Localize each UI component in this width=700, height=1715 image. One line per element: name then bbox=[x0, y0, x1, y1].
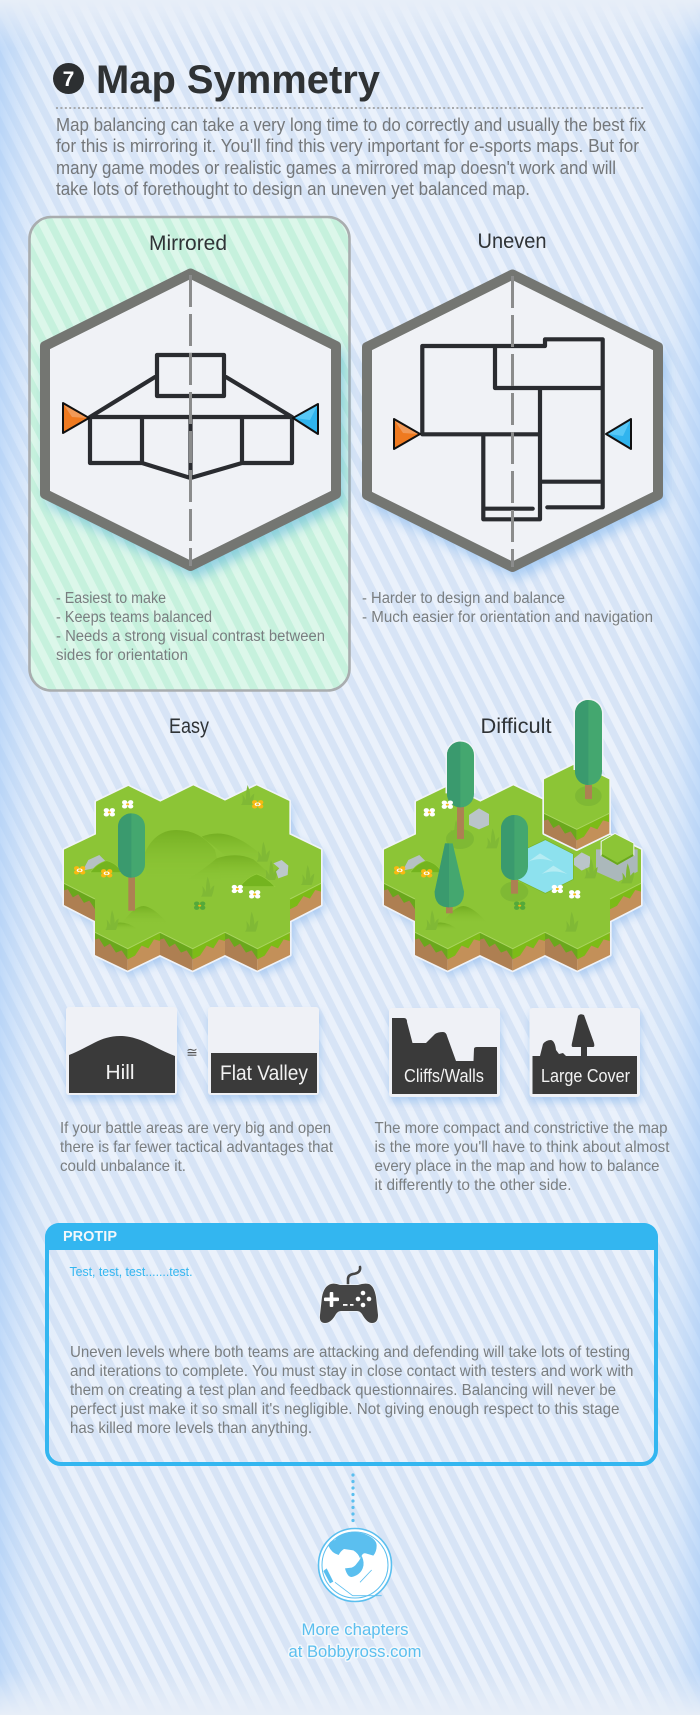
grey cover block bbox=[596, 834, 638, 882]
protip body text: has killed more levels than anything. bbox=[70, 1420, 312, 1437]
intro paragraph: many game modes or realistic games a mirrored map doesn't work and will bbox=[56, 158, 616, 178]
caption: easy: If your battle areas are very big and open bbox=[60, 1120, 331, 1137]
uneven notes bbox=[362, 590, 653, 626]
rocks and bushes bbox=[403, 808, 590, 930]
water bbox=[517, 840, 573, 893]
grass tufts bbox=[425, 820, 634, 932]
protip label: PROTIP bbox=[63, 1228, 117, 1245]
protip body text: and iterations to complete. You must stay in close contact with testers and work with bbox=[70, 1363, 634, 1380]
caption: difficult: it differently to the other side. bbox=[374, 1177, 572, 1194]
protip header bar bbox=[45, 1223, 658, 1250]
island: difficult bbox=[384, 698, 645, 975]
terrain card: large cover bbox=[530, 1008, 640, 1097]
terrain card shadows bbox=[67, 1012, 641, 1102]
dotted connector bbox=[351, 1475, 355, 1522]
caption: difficult: The more compact and constrictive the map bbox=[374, 1120, 668, 1137]
caption: easy: there is far fewer tactical advantages that bbox=[60, 1139, 334, 1156]
protip body text: perfect just make it so small it's negligible. Not giving enough respect to this stage bbox=[70, 1401, 620, 1418]
panel: protip bbox=[45, 1223, 658, 1464]
icon: orange spawn bbox=[394, 419, 420, 449]
caption: easy bbox=[60, 1120, 334, 1175]
terrain card: cliffs and walls: Cliffs/Walls bbox=[404, 1066, 484, 1086]
tree: tall right bbox=[573, 698, 603, 799]
caption: difficult bbox=[374, 1120, 670, 1194]
uneven notes: - Harder to design and balance bbox=[362, 590, 565, 607]
footer link text bbox=[288, 1620, 422, 1661]
hex map: mirrored bbox=[45, 274, 341, 574]
icon: orange spawn bbox=[63, 403, 89, 433]
title: 7 bbox=[63, 68, 74, 91]
tree shadows bbox=[446, 786, 602, 902]
approx symbol: ≅ bbox=[186, 1044, 198, 1060]
mirrored notes: - Keeps teams balanced bbox=[56, 609, 212, 626]
tree bbox=[118, 813, 145, 911]
icon: blue spawn bbox=[606, 419, 631, 449]
mirrored notes bbox=[56, 590, 325, 664]
heading: mirrored: Mirrored bbox=[149, 232, 227, 255]
caption: easy: could unbalance it. bbox=[60, 1158, 186, 1175]
heading: uneven: Uneven bbox=[478, 230, 546, 253]
panel: mirrored bbox=[30, 217, 350, 690]
terrain card: hill: Hill bbox=[106, 1062, 134, 1084]
island: easy bbox=[64, 785, 325, 975]
hills bbox=[103, 830, 275, 930]
icon: blue spawn bbox=[293, 404, 318, 434]
rocks and bushes bbox=[83, 855, 288, 887]
icon: author portrait bbox=[318, 1528, 392, 1602]
intro paragraph: for this is mirroring it. You'll find this very important for e-sports maps. But for bbox=[56, 136, 639, 156]
grass tufts bbox=[105, 785, 314, 932]
intro paragraph bbox=[56, 115, 646, 199]
uneven notes: - Much easier for orientation and navigation bbox=[362, 609, 653, 626]
mirrored notes: - Easiest to make bbox=[56, 590, 166, 607]
mirrored notes: sides for orientation bbox=[56, 647, 188, 664]
flowers bbox=[394, 800, 580, 910]
icon: game controller bbox=[320, 1267, 378, 1323]
terrain card: flat valley bbox=[208, 1007, 319, 1095]
tree: left bbox=[445, 740, 475, 839]
mirrored notes: - Needs a strong visual contrast between bbox=[56, 628, 325, 645]
terrain card: flat valley: Flat Valley bbox=[220, 1062, 308, 1085]
protip body text: Uneven levels where both teams are attacking and defending will take lots of testing bbox=[70, 1344, 630, 1361]
caption: difficult: is the more you'll have to think about almost bbox=[374, 1139, 670, 1156]
footer link text: at Bobbyross.com bbox=[288, 1642, 422, 1661]
title: Map Symmetry bbox=[96, 58, 381, 102]
caption: difficult: every place in the map and how to balance bbox=[374, 1158, 660, 1175]
protip subtitle: Test, test, test.......test. bbox=[70, 1264, 192, 1279]
protip body text: them on creating a test plan and feedback questionnaires. Balancing will never be bbox=[70, 1382, 616, 1399]
raised hex bbox=[544, 763, 609, 849]
heading: difficult: Difficult bbox=[480, 715, 552, 738]
footer link text: More chapters bbox=[302, 1620, 408, 1639]
hex map: uneven bbox=[367, 274, 663, 575]
intro paragraph: Map balancing can take a very long time to do correctly and usually the best fix bbox=[56, 115, 646, 135]
heading: easy: Easy bbox=[169, 715, 209, 738]
panel: uneven bbox=[362, 230, 663, 626]
flowers bbox=[74, 800, 263, 910]
tree: cone bbox=[435, 843, 464, 913]
terrain card: hill bbox=[66, 1007, 177, 1095]
intro paragraph: take lots of forethought to design an uneven yet balanced map. bbox=[56, 179, 530, 199]
terrain card: large cover: Large Cover bbox=[541, 1066, 630, 1086]
tree: middle bbox=[501, 815, 528, 894]
protip body text bbox=[70, 1344, 634, 1437]
terrain card: cliffs and walls bbox=[389, 1008, 500, 1097]
